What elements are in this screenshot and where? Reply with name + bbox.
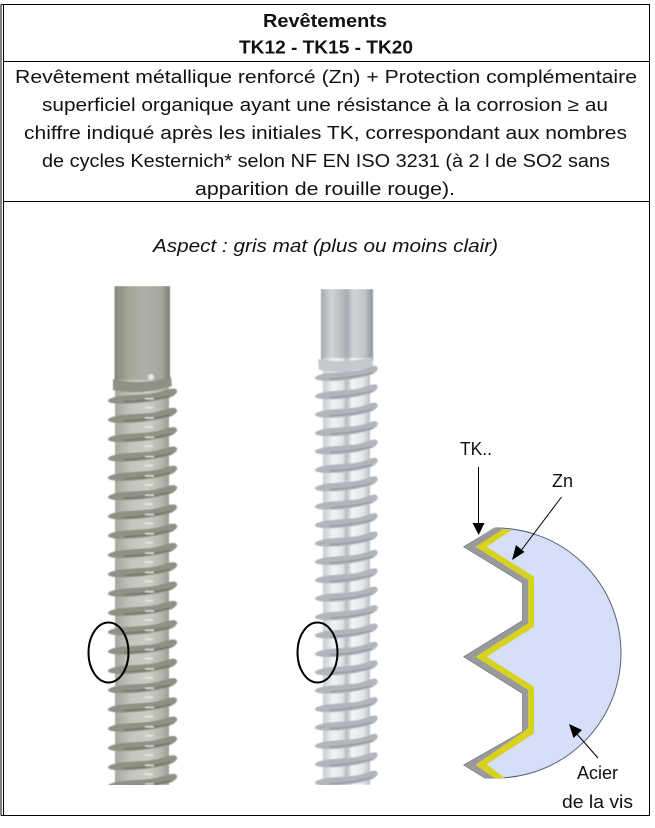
highlight ellipse on zinc screw (298, 622, 338, 682)
description text block: chiffre indiqué après les initiales TK, correspondant aux nombres (24, 122, 627, 143)
description text block: apparition de rouille rouge). (195, 178, 455, 199)
cross-section diagram (464, 527, 621, 778)
photo: zinc-plated screw (315, 289, 378, 786)
label: TK: TK.. (460, 438, 492, 459)
steel body (464, 528, 621, 778)
photo: grey coated screw (108, 286, 177, 793)
label: steel: de la vis (562, 791, 633, 812)
heading (239, 10, 413, 58)
arrow: Zn (512, 497, 562, 560)
description text block (15, 66, 637, 199)
TK coating layer (464, 527, 528, 778)
aspect caption: Aspect : gris mat (plus ou moins clair) (152, 235, 498, 256)
label: Zn: Zn (552, 470, 573, 491)
label: steel: Acier (577, 762, 618, 783)
heading: Revêtements (263, 10, 387, 31)
highlight ellipse on grey screw (88, 622, 128, 682)
description text block: superficiel organique ayant une résistance à la corrosion ≥ au (42, 94, 608, 115)
arrow: TK (472, 467, 484, 535)
description text block: de cycles Kesternich* selon NF EN ISO 3231 (à 2 l de SO2 sans (42, 150, 610, 171)
description text block: Revêtement métallique renforcé (Zn) + Protection complémentaire (15, 66, 637, 87)
label: steel (562, 762, 633, 812)
zinc layer (476, 529, 534, 778)
arrow: steel (569, 724, 598, 758)
heading: TK12 - TK15 - TK20 (239, 36, 413, 58)
